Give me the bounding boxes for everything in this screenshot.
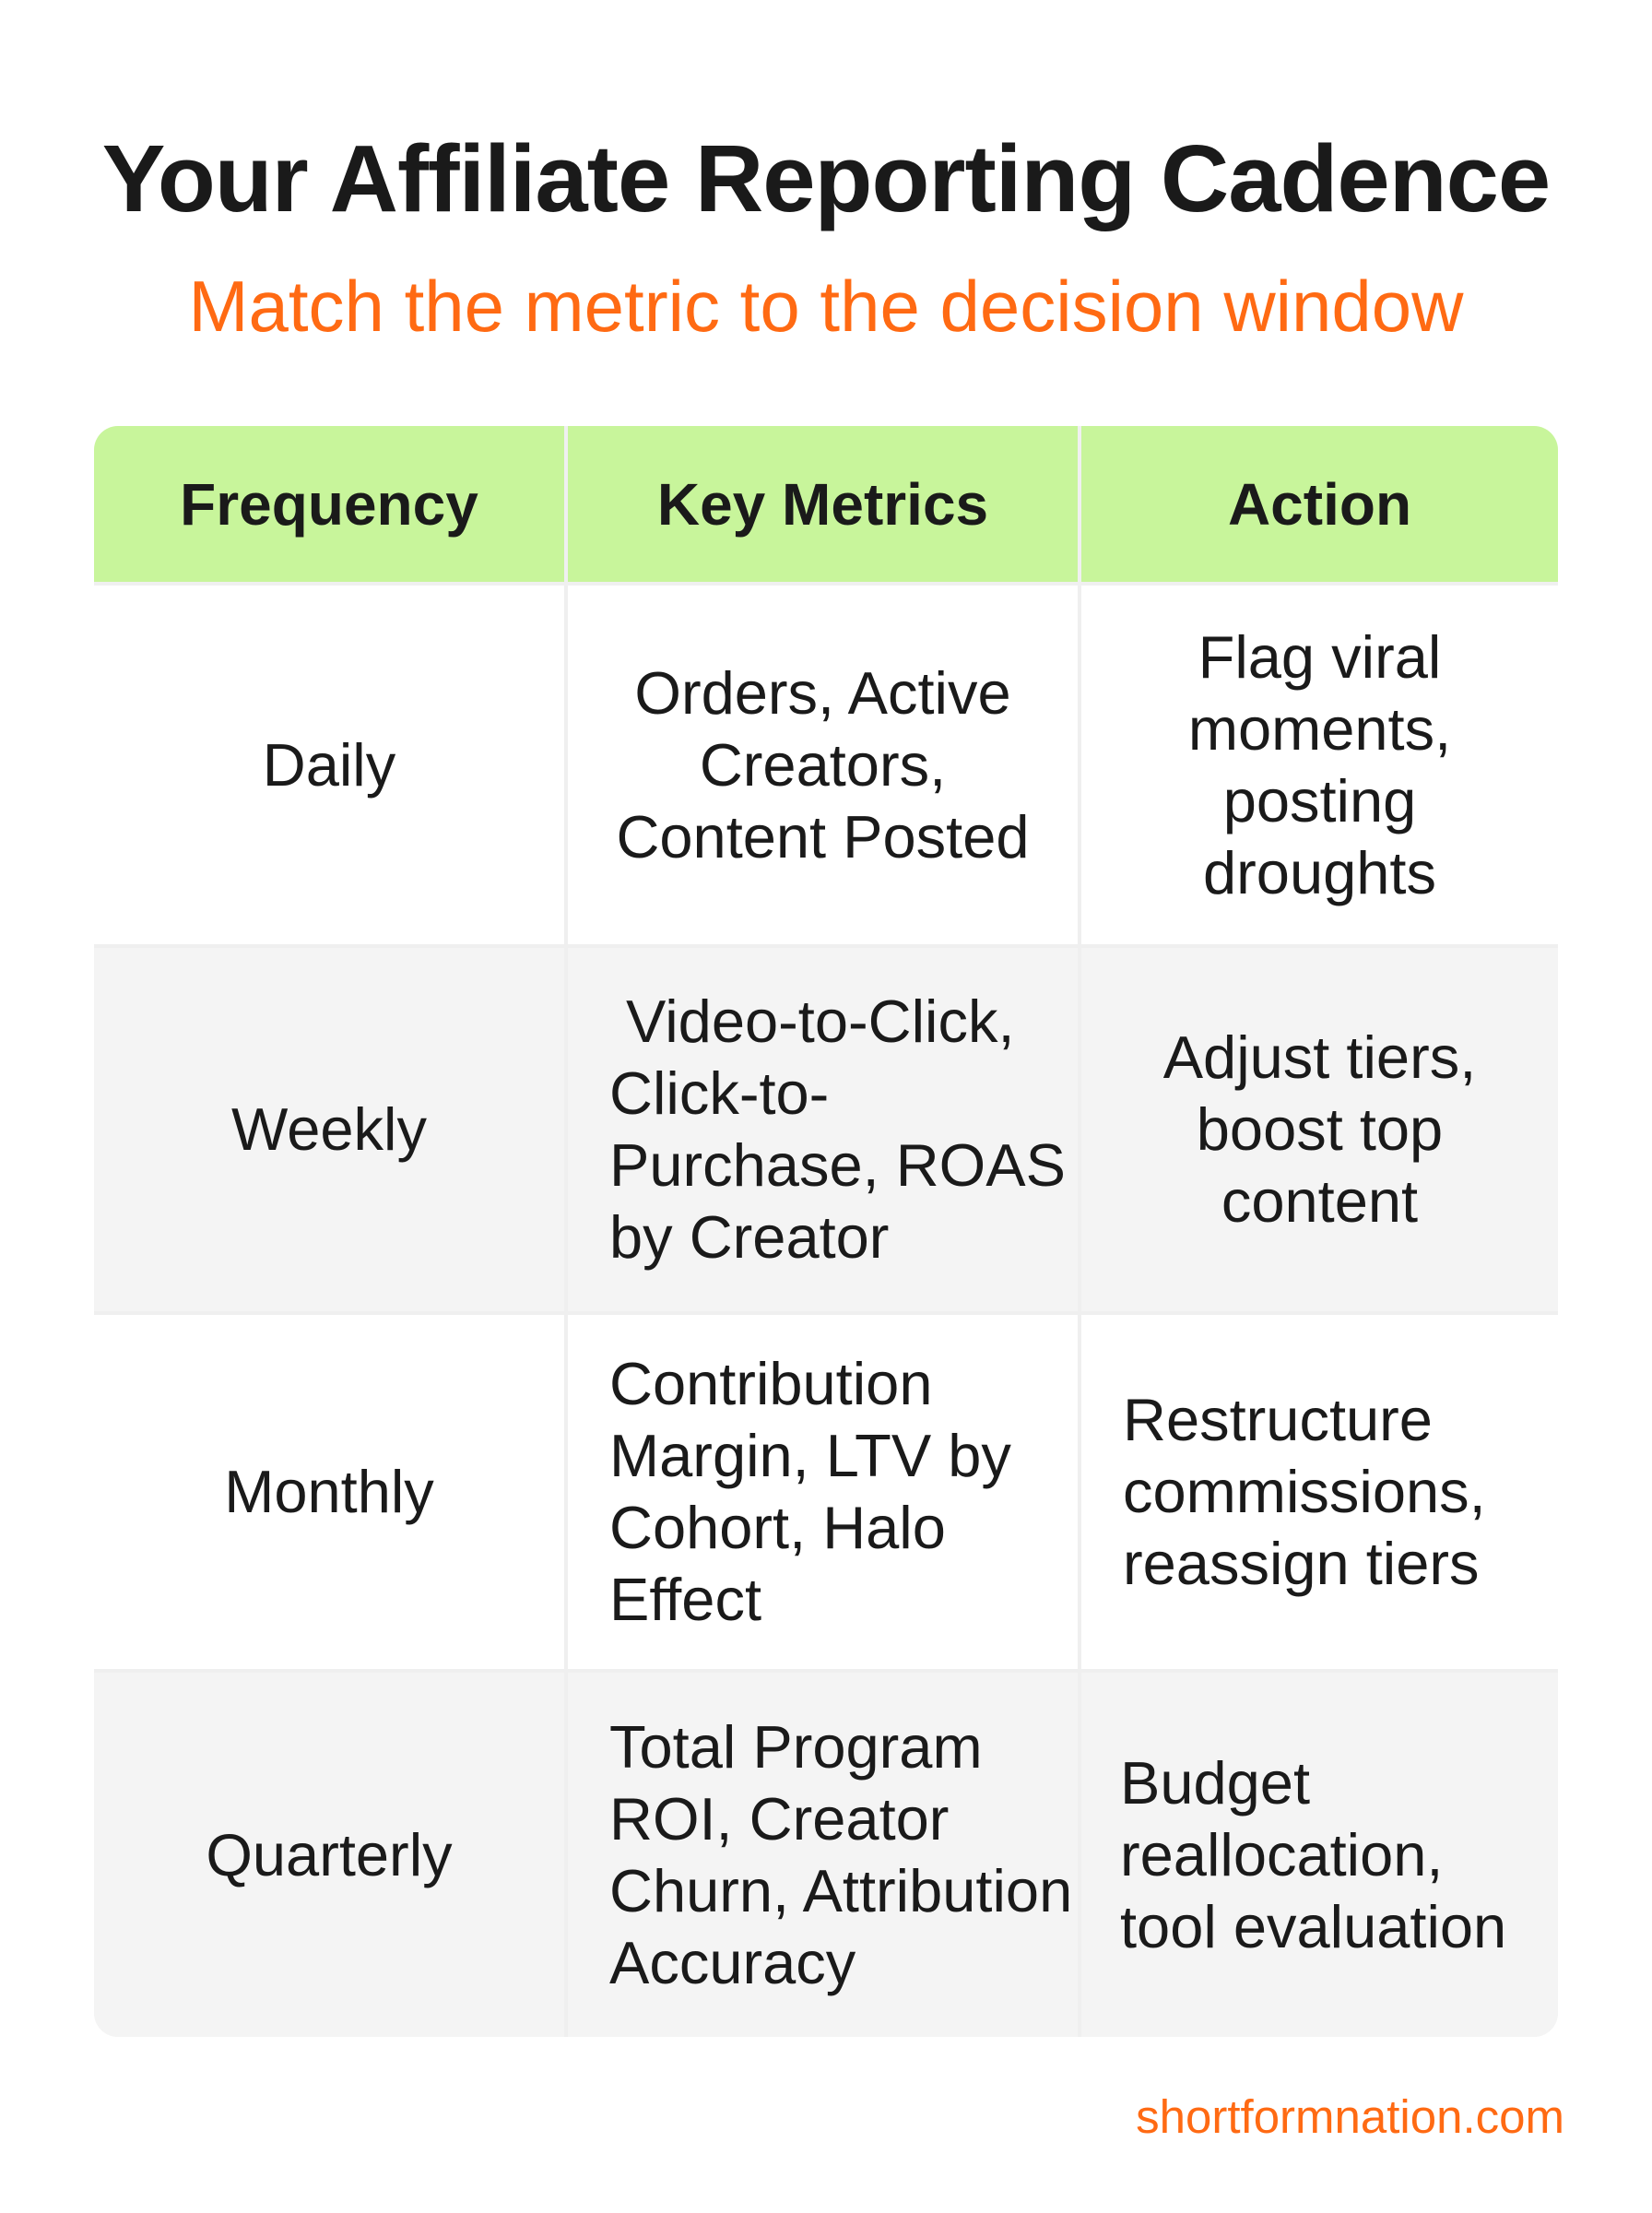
- row: daily: Flag viral: [1198, 623, 1441, 690]
- row: daily: [94, 586, 1558, 948]
- footer url: shortformnation.com: [1136, 2090, 1564, 2143]
- table: [94, 426, 1558, 2037]
- row: weekly: by Creator: [609, 1203, 889, 1271]
- row: daily: Daily: [263, 730, 395, 799]
- row: weekly: boost top: [1197, 1095, 1443, 1163]
- row: quarterly: [94, 1673, 1558, 2038]
- row: weekly: Weekly: [231, 1095, 427, 1163]
- row: quarterly: Total Program: [609, 1713, 983, 1781]
- title: Your Affiliate Reporting Cadence: [102, 125, 1550, 231]
- row: monthly: commissions,: [1123, 1458, 1486, 1525]
- header row: Key Metrics: [657, 470, 988, 537]
- row: weekly: Click-to-: [609, 1059, 829, 1127]
- row: daily: Creators,: [700, 730, 946, 799]
- row: quarterly: Quarterly: [206, 1821, 453, 1888]
- row: quarterly: ROI, Creator: [609, 1785, 949, 1852]
- row: quarterly: Accuracy: [609, 1929, 856, 1996]
- row: weekly: content: [1221, 1167, 1418, 1235]
- row: weekly: Adjust tiers,: [1163, 1024, 1476, 1091]
- row: quarterly: Churn, Attribution: [609, 1857, 1072, 1924]
- row: daily: posting: [1223, 767, 1416, 834]
- row: weekly: Purchase, ROAS: [609, 1131, 1066, 1199]
- header row: Frequency: [180, 470, 478, 537]
- row: quarterly: Budget: [1120, 1749, 1310, 1817]
- row: daily: Content Posted: [616, 802, 1030, 870]
- row: quarterly: reallocation,: [1120, 1821, 1444, 1888]
- row: weekly: [94, 948, 1558, 1315]
- row: monthly: [94, 1315, 1558, 1673]
- row: daily: droughts: [1203, 839, 1436, 905]
- header row: Action: [1228, 470, 1411, 537]
- row: quarterly: tool evaluation: [1120, 1893, 1506, 1960]
- row: daily: moments,: [1188, 695, 1451, 762]
- row: monthly: Margin, LTV by: [609, 1422, 1011, 1489]
- row: monthly: Cohort, Halo: [609, 1494, 946, 1561]
- row: monthly: Effect: [609, 1566, 761, 1633]
- row: monthly: Contribution: [609, 1350, 933, 1417]
- row: monthly: Restructure: [1123, 1386, 1433, 1453]
- subtitle: Match the metric to the decision window: [188, 266, 1463, 347]
- row: monthly: Monthly: [224, 1458, 434, 1525]
- header row: [94, 426, 1558, 582]
- row: weekly: Video-to-Click,: [626, 988, 1015, 1055]
- row: monthly: reassign tiers: [1123, 1530, 1480, 1597]
- row: daily: Orders, Active: [634, 658, 1011, 727]
